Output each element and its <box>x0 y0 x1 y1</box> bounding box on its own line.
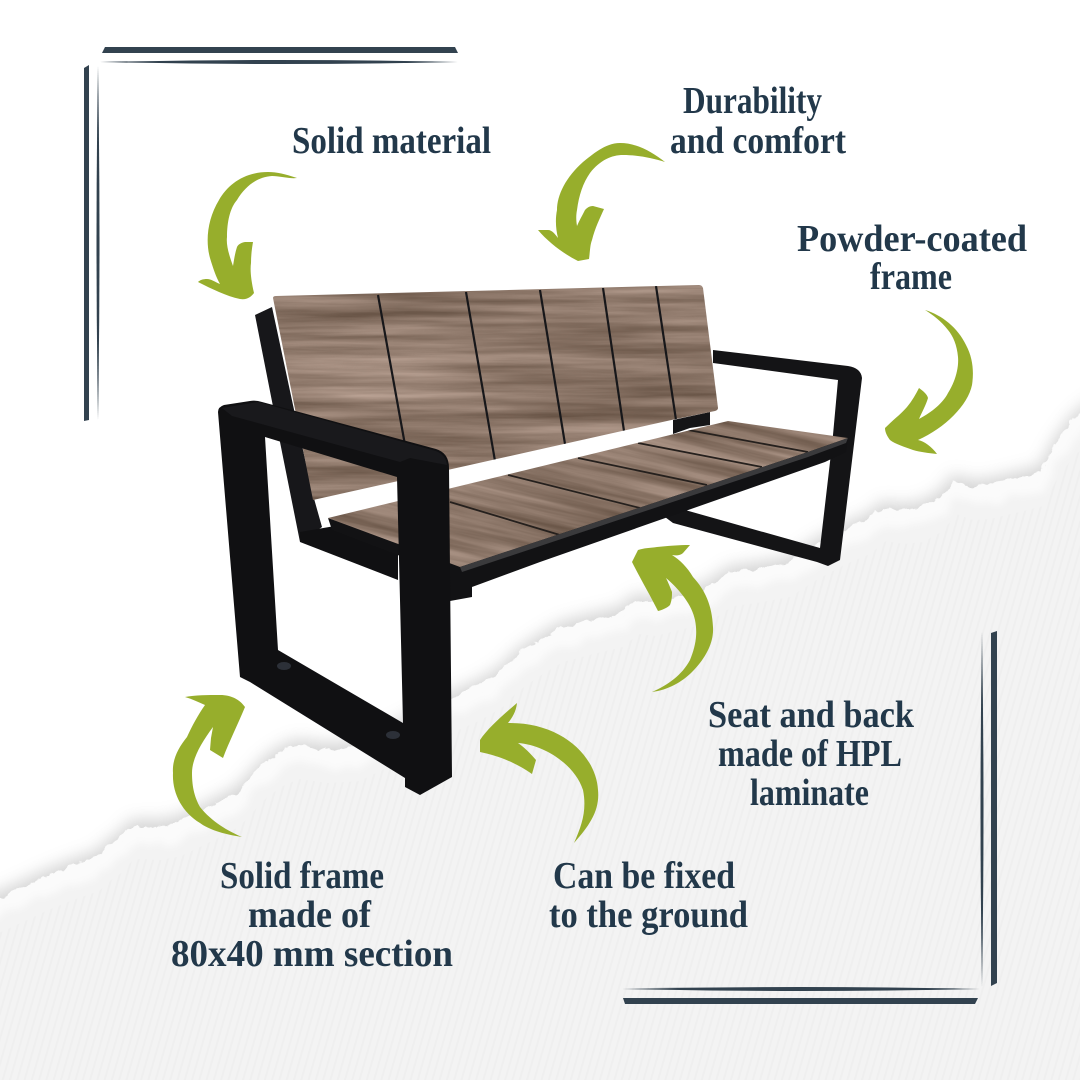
corner frame: bottom right <box>622 631 997 1004</box>
arrow: solid frame <box>173 695 245 837</box>
label: fixed to the ground: to the ground <box>549 894 748 936</box>
arrow: seat and back <box>632 545 713 692</box>
arrow: powder-coated frame <box>885 310 973 454</box>
bench seat <box>328 421 848 567</box>
arrow: fixed to the ground <box>480 703 598 843</box>
label: seat and back: made of HPL <box>718 733 902 775</box>
label: durability and comfort: Durability <box>683 80 822 122</box>
corner frame: top left <box>84 47 458 421</box>
bench far side frame <box>665 350 862 566</box>
label: durability and comfort: and comfort <box>670 120 846 162</box>
bench rear posts <box>673 412 710 434</box>
arrow: durability and comfort <box>538 143 665 261</box>
label: seat and back: Seat and back <box>708 694 915 736</box>
arrow: solid material <box>198 172 297 299</box>
label: powder-coated frame: Powder-coated <box>797 218 1027 260</box>
bench arm top face highlight <box>222 402 447 465</box>
label: seat and back <box>708 694 915 814</box>
label: solid frame: Solid frame <box>220 855 384 897</box>
label: seat and back: laminate <box>750 772 869 814</box>
label: solid material: Solid material <box>292 120 491 162</box>
bench <box>218 285 862 795</box>
label: powder-coated frame <box>797 218 1027 298</box>
label: powder-coated frame: frame <box>870 256 952 298</box>
bench foot bolts <box>277 662 400 739</box>
label: solid frame: 80x40 mm section <box>171 933 453 975</box>
bench seat front edge <box>460 438 848 572</box>
bench left back support <box>255 307 322 542</box>
bench near side frame <box>218 401 452 795</box>
label: solid frame: made of <box>248 894 372 936</box>
label: fixed to the ground <box>549 855 748 936</box>
label: solid frame <box>171 855 453 975</box>
bench lower rail left <box>300 526 398 580</box>
label: fixed to the ground: Can be fixed <box>553 855 735 897</box>
label: durability and comfort <box>670 80 846 162</box>
bench seat underside rail <box>328 438 848 601</box>
bench backrest <box>273 285 718 500</box>
